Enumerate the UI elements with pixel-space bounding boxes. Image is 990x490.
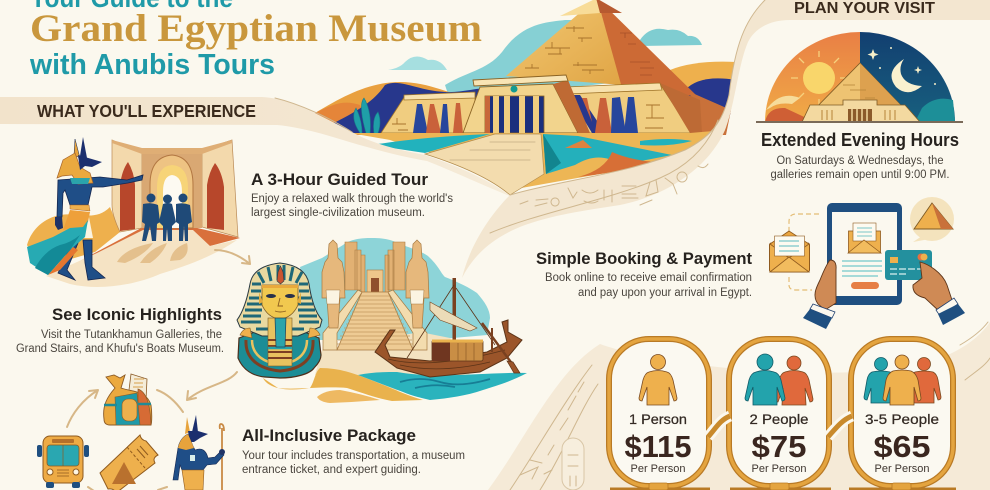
text block: extended evening hours: On Saturdays & Wednesdays, the [776,155,944,167]
pyramid [506,0,697,96]
dashed connectors [789,214,819,290]
face [262,285,298,319]
text block: all-inclusive package: All-Inclusive Package [242,426,416,445]
left wing [381,93,475,133]
collar [238,330,321,378]
cartouche connectors [708,416,852,437]
ribbon and plan your visit band [462,0,990,278]
text block: simple booking and payment: and pay upon your arrival in Egypt. [578,287,752,299]
text block: see iconic highlights [16,305,224,355]
statue left [322,240,345,328]
orange hill [315,82,480,135]
left hand [803,260,836,329]
arrow: tour to highlights [215,250,250,264]
ground [350,130,725,190]
stone causeway [425,134,544,195]
heading: plan your visit: PLAN YOUR VISIT [794,0,935,17]
arrow: bag to anubis [157,390,183,412]
desert plants [354,98,380,133]
banner heading: WHAT YOU'LL EXPERIENCE [37,101,256,121]
text block: all-inclusive package: Your tour includes transportation, a museum [242,450,465,462]
arch walls [112,140,142,232]
visitor shadows [117,243,188,263]
text block: see iconic highlights: Visit the Tutankhamun Galleries, the [41,329,222,341]
price card: 2 people: Per Person [752,463,806,475]
arrow: bus to bag [67,390,98,427]
price card: 3-5 people: $65 [874,429,930,464]
text block: 3-hour guided tour [251,170,453,219]
icon: small anubis with staff [173,415,225,490]
price card: 3-5 people: Per Person [874,463,930,475]
chest stripes [268,318,292,366]
text block: 3-hour guided tour: largest single-civilization museum. [251,207,425,219]
text block: all-inclusive package: entrance ticket, and expert guiding. [242,464,421,476]
statue right [406,240,429,328]
sash [27,220,88,275]
hull [375,320,522,377]
text block: extended evening hours [761,130,959,181]
price card: 1 person [609,339,710,490]
text block: extended evening hours: Extended Evening Hours [761,130,959,150]
illustration: tutankhamun mask [237,263,322,378]
ears [74,139,80,158]
illustration: anubis guide at the gallery arch [27,137,240,287]
central arch [150,155,193,228]
navy hill [330,83,500,134]
head [78,155,102,170]
side niches [120,162,135,231]
visitors silhouettes [142,194,192,241]
right wing [567,84,692,133]
sand [315,332,470,392]
water [358,372,527,400]
pyramid speech bubble [910,197,954,242]
illustration: stairs and statues [263,238,490,403]
title line 2: Grand Egyptian Museum [30,7,482,50]
bottom right beige scroll background [488,322,990,490]
text block: 3-hour guided tour: Enjoy a relaxed walk through the world's [251,193,453,205]
icon: ticket [100,435,158,490]
icon: bus [37,436,89,488]
price card: 1 person: Per Person [630,463,686,475]
sky blob [445,20,640,100]
belt and kilt [83,212,93,238]
sand floor [46,230,237,287]
icon: travel bag [104,374,152,425]
text block: extended evening hours: galleries remain open until 9:00 PM. [770,169,950,181]
mast and rigging [452,278,456,340]
text block: see iconic highlights: Grand Stairs, and Khufu's Boats Museum. [16,343,224,355]
price card: 2 people: $75 [752,429,806,464]
torso and arm [57,175,143,217]
nemes headdress [237,263,322,336]
legs [83,240,105,280]
tablet envelope [848,223,881,253]
grand stairs [337,292,413,350]
text block: all-inclusive package [242,426,465,476]
teal backdrop [300,238,490,340]
people icons [864,355,941,405]
price card: 1 person: 1 Person [629,412,687,427]
text block: simple booking and payment: Book online to receive email confirmation [545,272,752,284]
small cloud [388,56,447,70]
text block: simple booking and payment [536,249,752,299]
text block: simple booking and payment: Simple Booking & Payment [536,249,752,268]
hero illustration: pyramid and museum [315,0,736,195]
people icons [745,354,813,405]
cabin [432,340,483,361]
price card: 3-5 people [849,339,956,490]
beard [275,318,286,347]
arrows: bottom [88,487,167,490]
price card: 1 person: $115 [624,429,692,464]
banner: what you'll experience [0,97,512,197]
anubis figure [27,137,143,280]
title line 3: with Anubis Tours [29,49,275,81]
tablet body [827,203,902,305]
title [29,0,482,81]
orange floor band [78,227,240,262]
brown slope right [690,92,731,135]
price card: 2 people: 2 People [750,412,808,427]
envelope left [770,231,810,272]
headdress [57,153,93,184]
shoulders [240,328,320,338]
oar [482,323,513,365]
pillars [345,242,405,293]
price card: 3-5 people: 3-5 People [865,412,939,427]
price card: 2 people [729,339,831,490]
central temple [463,75,590,133]
sail [430,302,477,331]
gold backdrop [27,207,120,268]
illustration: khufu's boat [358,278,527,400]
arrow: highlights to package [187,372,237,400]
icon: day and night pyramid [756,32,963,123]
text block: 3-hour guided tour: A 3-Hour Guided Tour [251,170,428,189]
right hand [913,262,965,325]
credit card [885,250,932,280]
text block: see iconic highlights: See Iconic Highlights [52,305,222,324]
person icon [639,354,677,405]
gold sand bank [263,368,423,401]
icon: tablet booking [770,197,965,329]
cobra crest [277,266,284,284]
